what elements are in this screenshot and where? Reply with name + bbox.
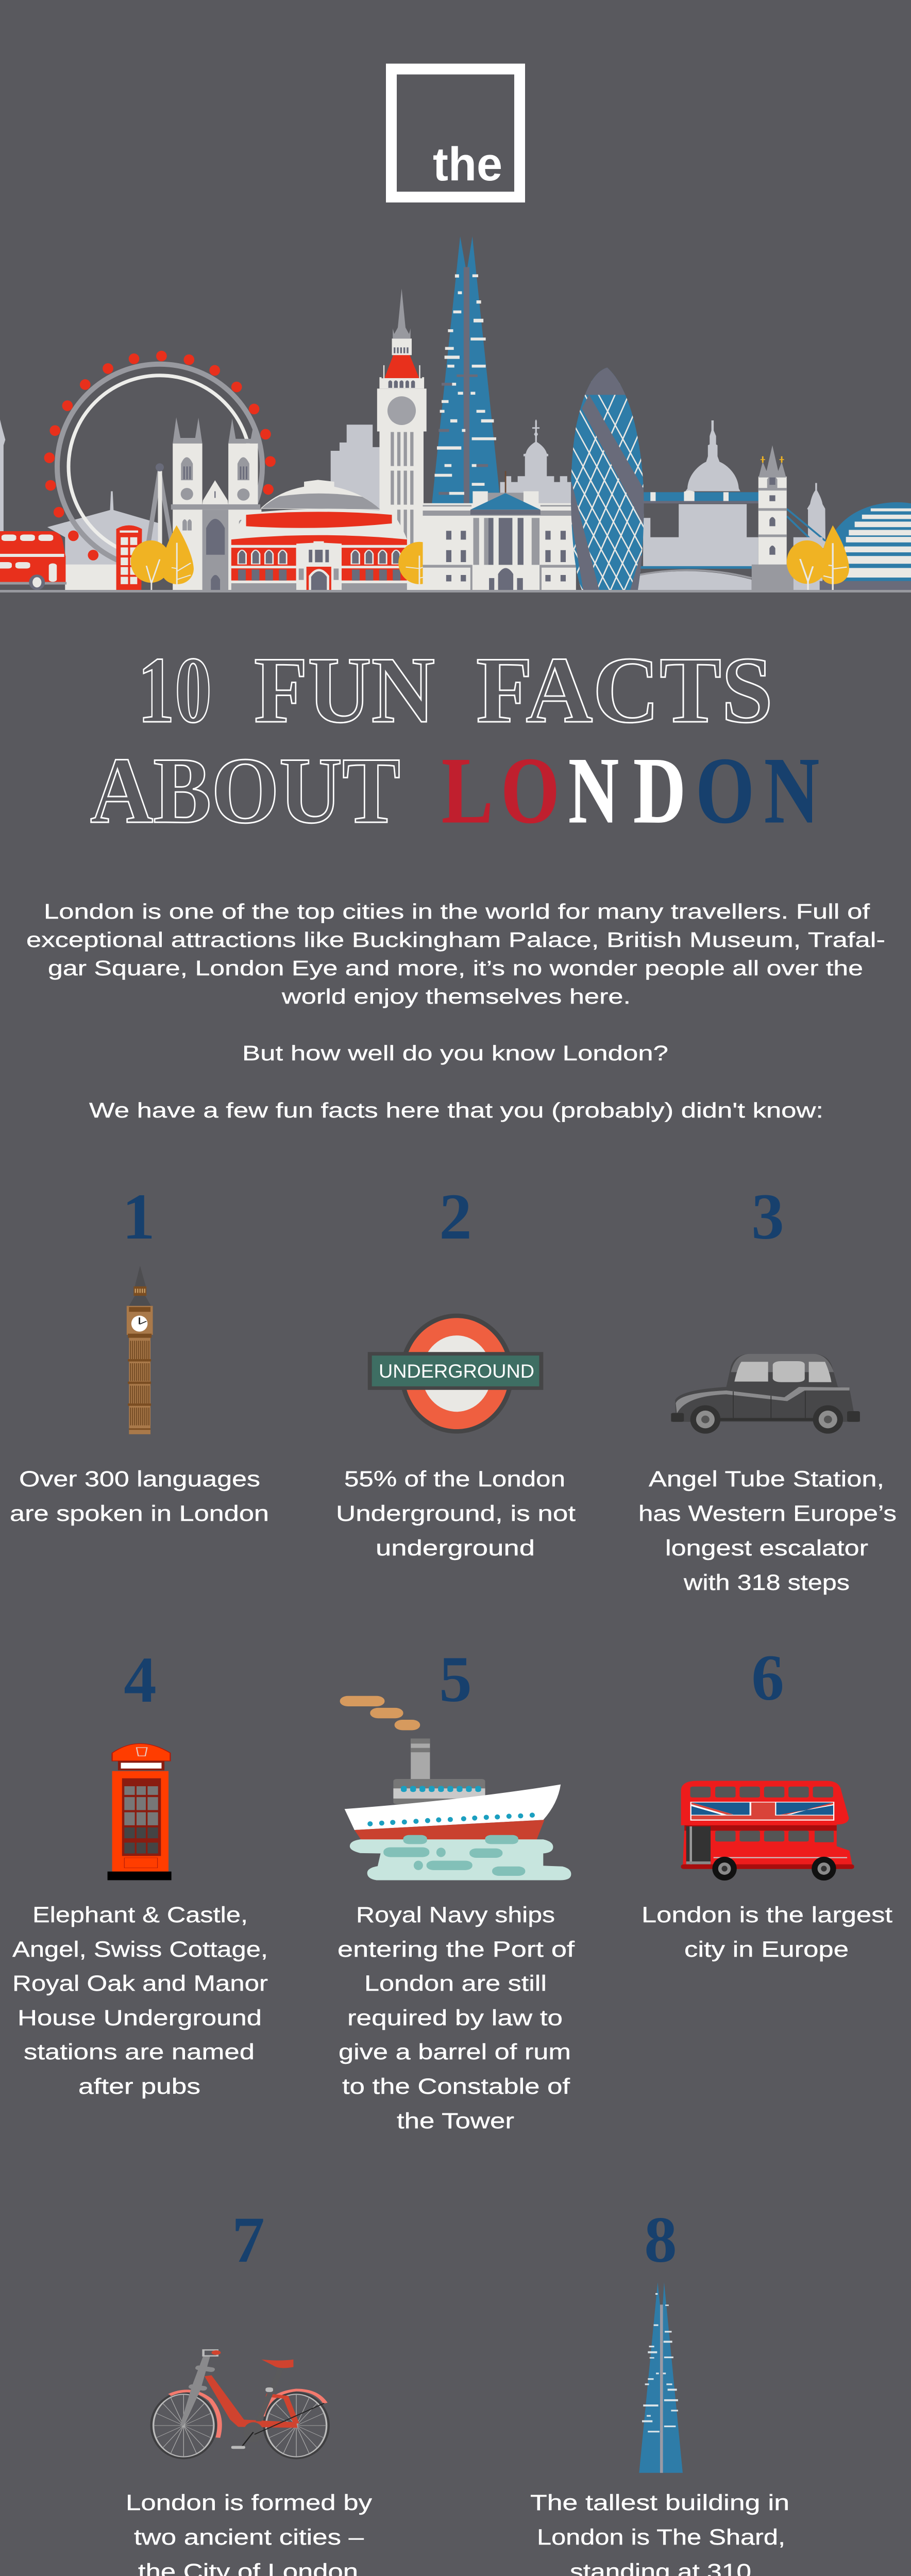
intro text <box>26 900 885 1122</box>
fact 5 <box>338 1643 575 2133</box>
St Paul's dome <box>643 420 825 567</box>
fact 4 text: House Underground <box>18 2006 262 2030</box>
number 8: 8 <box>644 2204 677 2276</box>
fact 8 <box>530 2204 789 2576</box>
number 7: 7 <box>232 2204 265 2276</box>
fact 2 text: Underground, is not <box>336 1501 576 1526</box>
the Gherkin <box>571 368 644 590</box>
double-decker bus <box>0 531 66 590</box>
coloured word: LONDON: L <box>442 738 493 843</box>
fact 1 text: Over 300 languages <box>19 1467 260 1492</box>
intro text: But how well do you know London? <box>242 1041 668 1065</box>
number 2: 2 <box>439 1181 472 1253</box>
icon: steam ship <box>340 1696 571 1880</box>
title: FACTS <box>476 637 773 742</box>
fact 7 text: London is formed by <box>126 2490 373 2515</box>
fact 4 text: Angel, Swiss Cottage, <box>12 1937 268 1962</box>
icon: black cab <box>671 1354 860 1434</box>
fact 8 text: The tallest building in <box>530 2490 789 2515</box>
fact 2 text: underground <box>376 1536 535 1561</box>
fact 1 <box>10 1181 269 1526</box>
abbey <box>171 417 261 590</box>
phone box <box>116 526 142 590</box>
intro text: London is one of the top cities in the world for many travellers. Full of <box>44 900 870 923</box>
Westminster Abbey, Royal Albert Hall, Big Ben and bus <box>0 289 441 591</box>
logo: the <box>392 69 519 197</box>
yellow trees <box>131 526 441 591</box>
fact 5 text: to the Constable of <box>342 2074 570 2099</box>
icon: red telephone box <box>108 1743 172 1880</box>
fact 4 text: Royal Oak and Manor <box>12 1971 268 1996</box>
fact 4 text <box>12 1903 268 2099</box>
title: 10 <box>138 637 212 742</box>
intro text: gar Square, London Eye and more, it’s no wonder people all over the <box>48 956 863 980</box>
icon: Big Ben <box>127 1266 153 1434</box>
coloured word: LONDON: O <box>696 738 754 843</box>
logo: the: the <box>433 138 502 191</box>
fact 2 text <box>336 1467 576 1561</box>
title <box>90 637 819 843</box>
fact 5 text: give a barrel of rum <box>339 2040 571 2064</box>
fact 6 text: London is the largest <box>642 1903 892 1927</box>
title: ABOUT <box>90 738 400 843</box>
fact 3 text: has Western Europe’s <box>638 1501 897 1526</box>
ground line <box>0 590 911 592</box>
coloured word: LONDON: N <box>764 738 819 843</box>
Royal Albert Hall <box>231 480 408 590</box>
Tower of London <box>500 419 571 504</box>
fact 3 text: Angel Tube Station, <box>649 1467 884 1492</box>
fact 6 text: city in Europe <box>684 1937 849 1962</box>
fact 2 text: 55% of the London <box>344 1467 565 1492</box>
fact 1 text: are spoken in London <box>10 1501 269 1526</box>
coloured word: LONDON: O <box>501 738 560 843</box>
fact 5 text <box>338 1903 575 2133</box>
fact 3 text: longest escalator <box>665 1536 868 1561</box>
coloured word: LONDON: D <box>633 738 686 843</box>
coloured word: LONDON <box>442 738 819 843</box>
fact 5 text: required by law to <box>347 2006 563 2030</box>
intro text: exceptional attractions like Buckingham Palace, British Museum, Trafal- <box>26 928 885 952</box>
yellow trees right <box>787 526 849 592</box>
palace, Tower of London, Gherkin, St Paul's, Tower Bridge and City Hall <box>423 364 911 603</box>
London Eye wheel <box>44 351 276 569</box>
fact 5 text: Royal Navy ships <box>356 1903 555 1927</box>
icon: Underground roundel <box>368 1314 543 1434</box>
Big Ben <box>377 289 427 590</box>
number 3: 3 <box>751 1181 784 1253</box>
City Hall <box>794 502 911 592</box>
fact 3 text <box>638 1467 897 1595</box>
intro text: We have a few fun facts here that you (probably) didn't know: <box>89 1098 823 1122</box>
fact 5 text: the Tower <box>397 2109 514 2133</box>
icon: bicycle <box>151 2350 328 2459</box>
title: FUN <box>254 637 435 742</box>
fact 4 text: stations are named <box>24 2040 255 2064</box>
icon: the Shard <box>639 2282 683 2473</box>
illustration: London skyline <box>0 236 911 603</box>
fact 1 text <box>10 1467 269 1526</box>
fact 7 text <box>123 2490 373 2576</box>
number 4: 4 <box>124 1644 157 1716</box>
fact 3 text: with 318 steps <box>683 1570 850 1595</box>
fact 4 text: after pubs <box>78 2074 200 2099</box>
number 1: 1 <box>122 1181 155 1253</box>
fact 7 text: two ancient cities – <box>134 2525 364 2550</box>
fact 8 text <box>530 2490 789 2576</box>
fact 4 <box>12 1644 268 2099</box>
fact 6 <box>642 1642 892 1962</box>
fact 6 text <box>642 1903 892 1962</box>
Tower Bridge <box>638 445 825 592</box>
icon: Union Jack bus <box>681 1781 854 1880</box>
fact 2 <box>336 1181 576 1561</box>
fact 5 text: entering the Port of <box>338 1937 575 1962</box>
coloured word: LONDON: N <box>568 738 619 843</box>
fact 4 text: Elephant & Castle, <box>32 1903 248 1927</box>
intro text: world enjoy themselves here. <box>281 985 631 1008</box>
palace <box>423 492 576 590</box>
the Shard <box>432 236 501 505</box>
fact 5 text: London are still <box>364 1971 547 1996</box>
fact 7 <box>123 2204 373 2576</box>
fact 3 <box>638 1181 897 1595</box>
icon: Underground roundel: UNDERGROUND <box>379 1361 534 1382</box>
number 5: 5 <box>439 1643 472 1716</box>
fact 8 text: London is The Shard, <box>537 2525 785 2550</box>
number 6: 6 <box>751 1642 784 1714</box>
